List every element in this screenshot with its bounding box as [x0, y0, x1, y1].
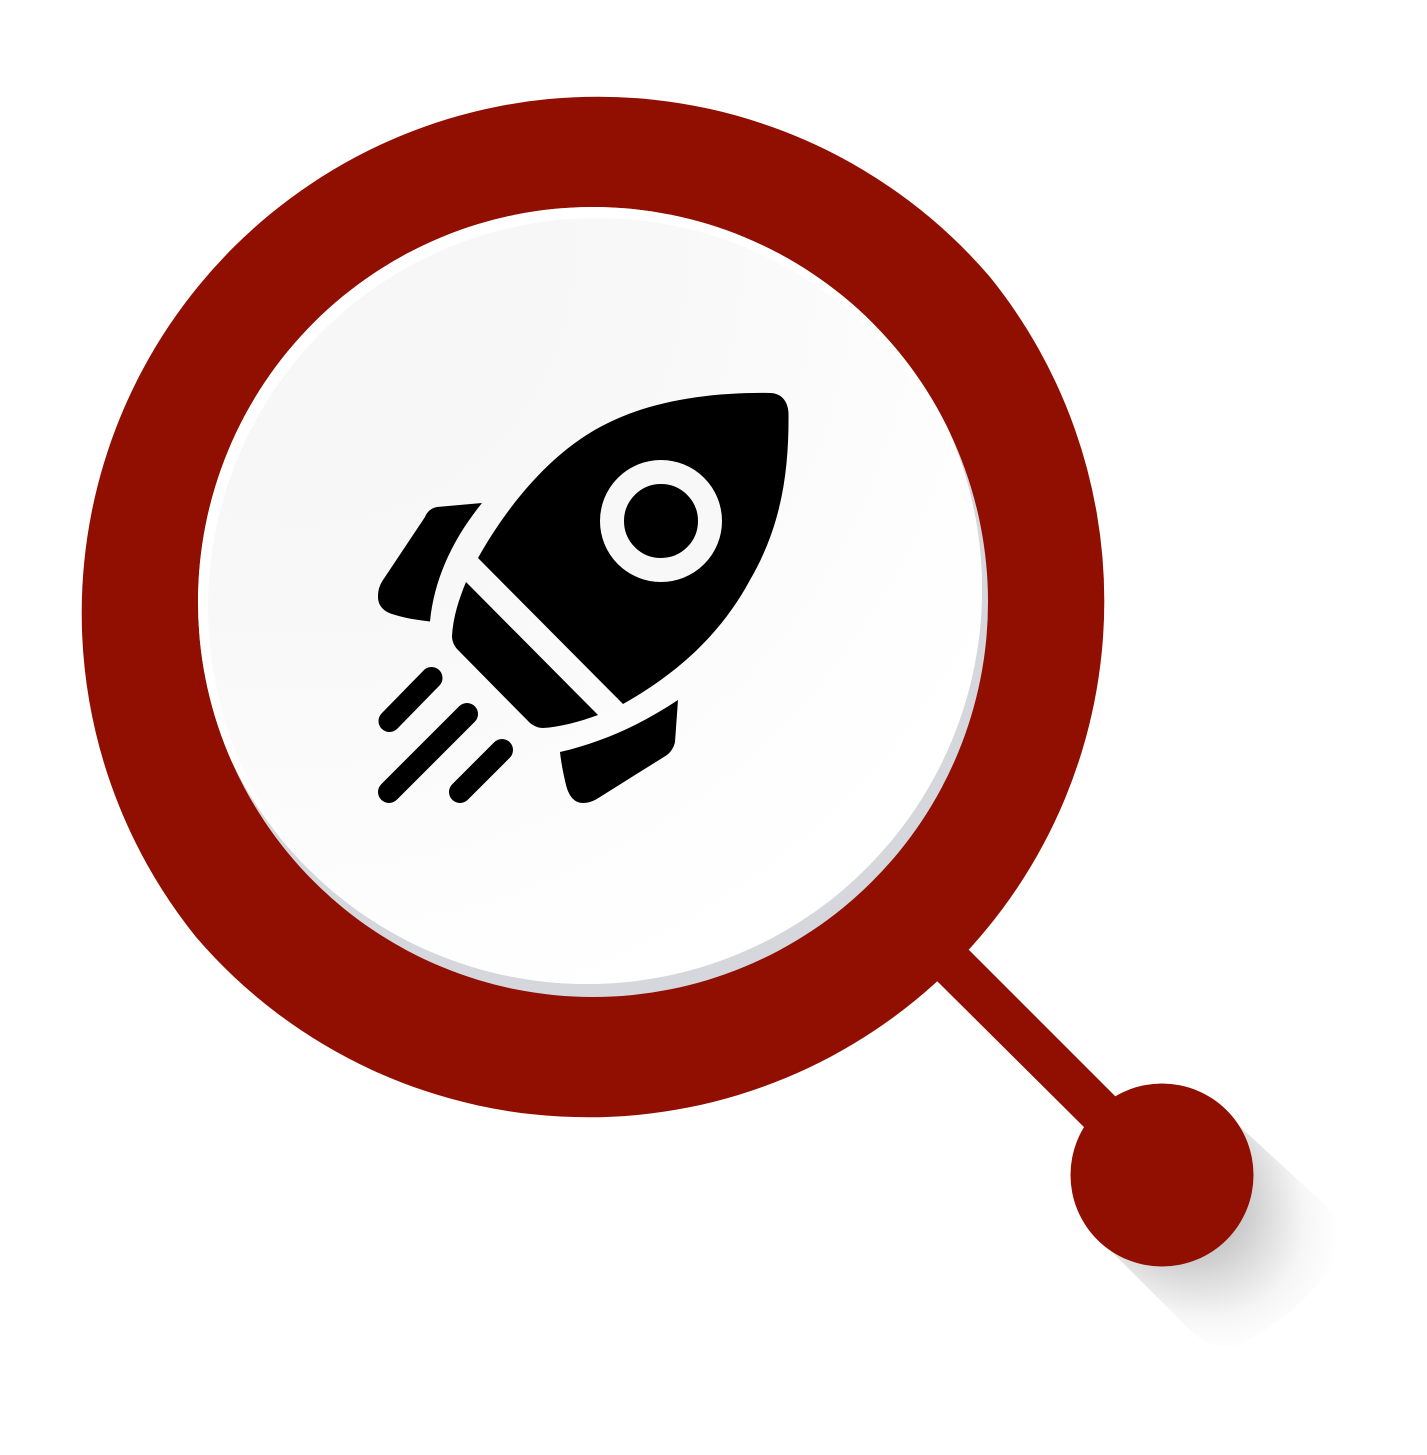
exhaust lines [389, 678, 502, 792]
lens [192, 194, 988, 997]
magnifier infographic [82, 96, 1308, 1320]
icon: rocket [378, 393, 789, 803]
left fin [378, 503, 482, 622]
handle knob [1070, 1084, 1254, 1266]
magnifier ring [82, 97, 1104, 1117]
right fin [560, 700, 678, 803]
long shadow of handle knob [1110, 1122, 1342, 1347]
rocket nose body [478, 393, 789, 704]
rocket window [612, 472, 710, 570]
handle [936, 949, 1254, 1266]
rocket lower body [452, 582, 598, 728]
